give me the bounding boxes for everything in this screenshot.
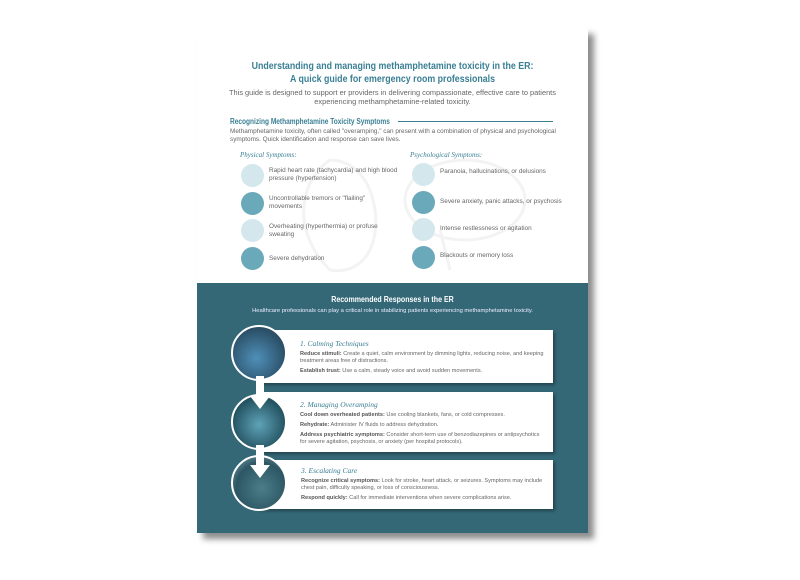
text: tremors: movements — [269, 203, 302, 210]
photo: emergency care — [231, 455, 287, 511]
card 2: Address psychiatric symptoms: Consider short-term use of benzodiazepines or antipsychotics for severe agitation, psychosis, or anxiety (per hospital protocols). — [300, 432, 539, 445]
icon: restlessness — [412, 218, 435, 241]
title: Understanding and managing methamphetamine toxicity in the ER: — [252, 60, 533, 72]
text: anxiety: Severe anxiety, panic attacks, or psychosis — [440, 198, 562, 205]
subtitle — [229, 88, 556, 106]
heading: psychological: Psychological Symptoms: — [410, 151, 482, 159]
text: dehydration: Severe dehydration — [269, 255, 324, 262]
text: heart rate: pressure (hypertension) — [269, 175, 336, 182]
icon: heart — [241, 164, 264, 187]
text: overheating: Overheating (hyperthermia) or profuse — [269, 223, 378, 230]
card 2 — [258, 392, 553, 452]
icon: blackout — [412, 246, 435, 269]
arrow 2 — [250, 445, 270, 478]
text: tremors — [269, 195, 365, 210]
card 3: Recognize critical symptoms: Look for stroke, heart attack, or seizures. Symptoms may include chest pain, difficulty speaking, or loss of consciousness. — [301, 478, 542, 491]
card 1 — [258, 330, 553, 383]
card 1: 1. Calming Techniques — [300, 339, 369, 348]
card 3 — [258, 460, 553, 509]
card 3: Respond quickly: Call for immediate interventions when severe complications arise. — [301, 495, 511, 501]
text: paranoia: Paranoia, hallucinations, or delusions — [440, 168, 546, 175]
background heart and brain outline — [302, 158, 526, 272]
subtitle: This guide is designed to support er providers in delivering compassionate, effective care to patients — [229, 88, 556, 97]
icon: hand — [241, 192, 264, 215]
intro text: Methamphetamine toxicity, often called "overamping," can present with a combination of physical and psychological symptoms. Quick identification and response can save lives. — [230, 128, 556, 142]
text: heart rate: Rapid heart rate (tachycardia) and high blood — [269, 167, 397, 174]
card 2: Cool down overheated patients: Use cooling blankets, fans, or cold compresses. — [300, 412, 505, 418]
panel: recommended responses — [197, 283, 588, 533]
title — [252, 60, 533, 85]
text: blackouts: Blackouts or memory loss — [440, 252, 513, 259]
heading: responses: Recommended Responses in the ER — [331, 295, 454, 304]
text: tremors: Uncontrollable tremors or "flailing" — [269, 195, 365, 202]
icon: paranoia — [412, 163, 435, 186]
text: heart rate — [269, 167, 397, 182]
card 2: 2. Managing Overamping — [300, 400, 378, 409]
card 3: 3. Escalating Care — [301, 466, 357, 475]
subtitle: experiencing methamphetamine-related toxicity. — [314, 97, 471, 106]
section heading: symptoms: Recognizing Methamphetamine Toxicity Symptoms — [230, 117, 390, 126]
panel: physical symptoms — [240, 151, 397, 270]
photo: patient — [231, 394, 287, 450]
subheading: Healthcare professionals can play a critical role in stabilizing patients experiencing methamphetamine toxicity. — [252, 308, 533, 314]
heading: physical: Physical Symptoms: — [240, 151, 297, 159]
arrow 1 — [250, 376, 269, 409]
icon: anxiety — [412, 191, 435, 214]
card 2: Rehydrate: Administer IV fluids to address dehydration. — [300, 422, 438, 428]
card 1: Reduce stimuli: Create a quiet, calm environment by dimming lights, reducing noise, and keeping treatment areas free of distractions. — [300, 351, 543, 364]
card 1: Establish trust: Use a calm, steady voice and avoid sudden movements. — [300, 368, 482, 374]
title: A quick guide for emergency room professionals — [290, 73, 495, 85]
paper page — [197, 28, 588, 533]
icon: dehydration — [241, 247, 264, 270]
icon: thermometer — [241, 219, 264, 242]
text: restlessness: Intense restlessness or agitation — [440, 225, 532, 232]
text: overheating — [269, 223, 378, 238]
photo: hospital bed — [231, 325, 287, 381]
panel: psychological symptoms — [410, 151, 562, 269]
text: overheating: sweating — [269, 231, 294, 238]
